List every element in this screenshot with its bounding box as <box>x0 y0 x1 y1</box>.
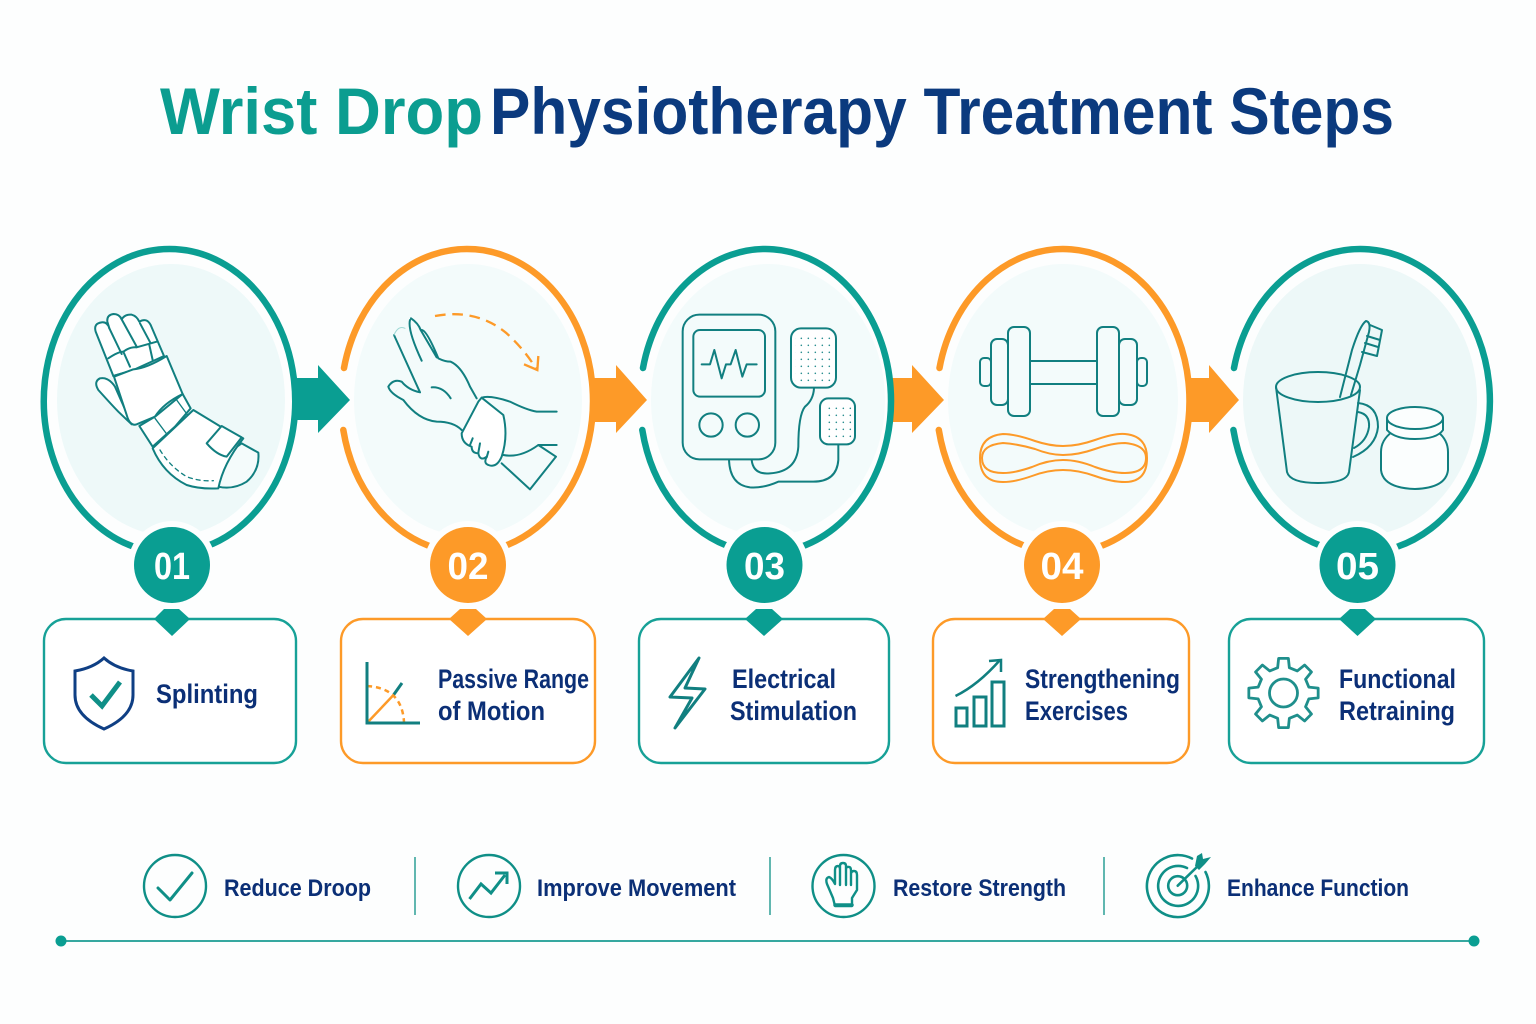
badge 01: 01 <box>154 546 190 588</box>
label: Splinting <box>156 679 258 709</box>
badge 03: 03 <box>744 546 785 588</box>
icon: lightning bolt <box>670 658 705 728</box>
ring <box>1233 249 1490 549</box>
label <box>1339 664 1456 726</box>
badge halo <box>424 521 512 609</box>
background disc <box>354 264 582 536</box>
label: Stimulation <box>730 696 857 726</box>
arrow: step 4 to 5 <box>1187 365 1239 433</box>
icon: hand and wrist stretch <box>388 314 557 489</box>
title: Physiotherapy Treatment Steps <box>490 74 1394 148</box>
dashed motion arrow <box>435 314 538 370</box>
benefits row <box>144 853 1409 917</box>
benefit: enhance function: Enhance Function <box>1227 875 1409 902</box>
icon: resistance band <box>980 434 1147 482</box>
benefit: improve movement <box>458 855 736 917</box>
ring <box>343 249 593 549</box>
icon: gear <box>1249 658 1318 728</box>
background disc <box>651 264 885 536</box>
icon: rising bar chart <box>956 660 1004 726</box>
card: strengthening exercises <box>933 609 1189 763</box>
label <box>730 664 857 726</box>
badge 03 <box>726 527 802 603</box>
background disc <box>57 264 285 536</box>
badge 05: 05 <box>1336 546 1379 588</box>
step 5: functional retraining <box>1229 249 1490 763</box>
footer line <box>56 936 1480 946</box>
ring <box>642 249 891 549</box>
badge halo <box>1018 521 1106 609</box>
icon: dumbbell <box>980 327 1147 416</box>
arrow: step 3 to 4 <box>889 365 944 433</box>
label <box>1025 664 1180 726</box>
icon: mug with toothbrush <box>1276 321 1382 483</box>
label: Passive Range <box>438 664 589 694</box>
badge halo <box>1314 521 1402 609</box>
badge 01 <box>134 527 210 603</box>
benefit: enhance function <box>1147 853 1409 917</box>
badge 02: 02 <box>448 546 488 588</box>
ring <box>939 249 1189 549</box>
title: Wrist Drop <box>160 74 483 148</box>
card: functional retraining <box>1229 609 1484 763</box>
label <box>438 664 589 726</box>
step 2: passive range of motion <box>341 249 647 763</box>
label: Electrical <box>732 664 836 694</box>
icon: wrist splint <box>95 314 259 489</box>
icon: shield check <box>75 658 133 729</box>
arrow: step 2 to 3 <box>592 365 647 433</box>
badge 04: 04 <box>1040 546 1084 588</box>
benefit: reduce droop <box>144 855 371 917</box>
benefit: restore strength <box>812 855 1066 917</box>
step 3: electrical stimulation <box>639 249 944 763</box>
icon: electrical stimulation device <box>683 315 855 487</box>
label: Retraining <box>1339 696 1455 726</box>
background disc <box>1243 264 1477 536</box>
title <box>160 74 1394 148</box>
badge halo <box>128 521 216 609</box>
card: splinting <box>44 609 296 763</box>
badge halo <box>720 521 808 609</box>
badge 02 <box>430 527 506 603</box>
benefit: improve movement: Improve Movement <box>537 875 736 902</box>
icon: range of motion chart <box>367 662 420 723</box>
card: passive range of motion <box>341 609 595 763</box>
badge 04 <box>1024 527 1100 603</box>
label: Exercises <box>1025 696 1128 726</box>
card: electrical stimulation <box>639 609 889 763</box>
benefit: restore strength: Restore Strength <box>893 875 1066 902</box>
label: Strengthening <box>1025 664 1180 694</box>
label: Functional <box>1339 664 1456 694</box>
label: of Motion <box>438 696 545 726</box>
step 1: splinting <box>44 249 350 763</box>
background disc <box>948 264 1178 536</box>
arrow: step 1 to 2 <box>296 365 350 433</box>
benefit: reduce droop: Reduce Droop <box>224 875 371 902</box>
icon: jar <box>1381 407 1448 489</box>
badge 05 <box>1320 527 1396 603</box>
step 4: strengthening exercises <box>933 249 1239 763</box>
ring <box>44 249 295 549</box>
